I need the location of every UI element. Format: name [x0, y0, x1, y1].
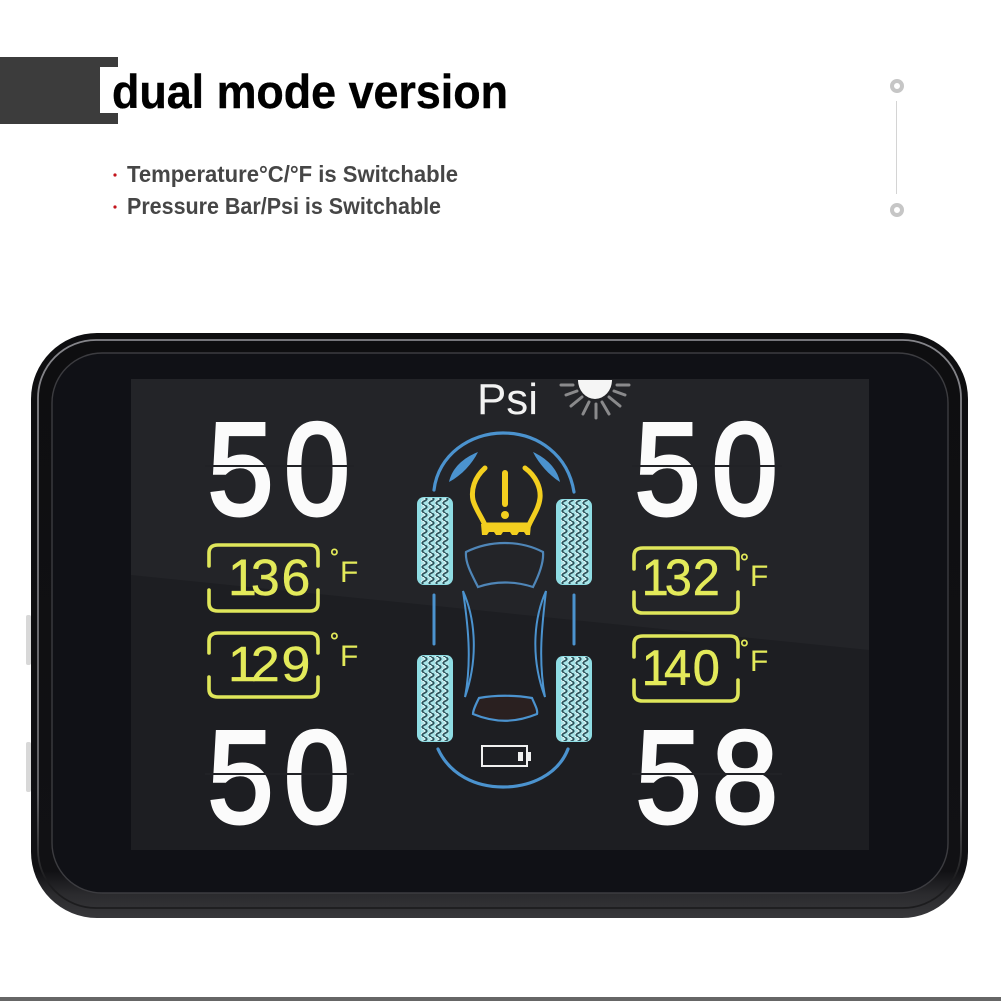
LCD screen [131, 379, 869, 850]
rear window [473, 696, 537, 721]
temperature front right [634, 548, 768, 613]
segment gaps on large digits [205, 466, 782, 774]
bullet 2 [113, 205, 117, 209]
unit: degrees F front right: ° [740, 549, 749, 574]
unit: degrees F front right [740, 549, 768, 593]
unit: degrees F rear right [740, 635, 768, 678]
temperature front left [209, 544, 358, 611]
car side lines [434, 591, 574, 697]
unit: degrees F rear right: F [750, 645, 768, 678]
unit: degrees F rear left: F [340, 640, 358, 673]
temperature front right: 132 [642, 549, 720, 606]
pressure rear right: 58 [636, 705, 778, 850]
temperature rear left: 129 [228, 636, 310, 692]
wheel rear left [417, 655, 453, 742]
pressure unit: Psi [477, 375, 538, 424]
icon: sun [561, 380, 629, 418]
device front glass [52, 353, 948, 893]
feature list [113, 161, 458, 219]
unit: degrees F rear right: ° [740, 635, 749, 660]
temperature front left: 136 [228, 550, 310, 606]
decorative connector with rings [892, 81, 902, 215]
windshield [466, 543, 543, 587]
wheel front left [417, 497, 453, 585]
device highlight line [38, 340, 961, 908]
unit: degrees F front left: F [340, 556, 358, 589]
unit: degrees F front left [330, 544, 358, 589]
bullet 1 [113, 173, 117, 177]
unit: degrees F front left: ° [330, 544, 339, 569]
temperature rear right [634, 635, 768, 701]
pressure front left: 50 [208, 397, 350, 542]
device body [31, 333, 968, 918]
temperature rear right: 140 [642, 640, 720, 696]
header tab [0, 57, 118, 124]
unit: degrees F rear left [330, 628, 358, 673]
device side buttons [26, 615, 31, 792]
wheels [417, 497, 592, 742]
feature: temperature: Temperature°C/°F is Switchable [127, 161, 458, 187]
wheel rear right [556, 656, 592, 742]
icon: battery [482, 746, 531, 766]
car rear arc [438, 749, 568, 787]
car diagram [417, 433, 592, 787]
pressure rear left: 50 [208, 705, 350, 850]
title: dual mode version [112, 65, 508, 118]
icon: tire pressure warning [472, 468, 540, 535]
feature: pressure: Pressure Bar/Psi is Switchable [127, 193, 441, 219]
front windshield streaks [449, 452, 560, 482]
unit: degrees F rear left: ° [330, 628, 339, 653]
wheel front right [556, 499, 592, 585]
pressure front right: 50 [635, 397, 777, 542]
footer rule [0, 997, 1001, 1001]
car front arc [434, 433, 574, 492]
monitor device [26, 333, 968, 918]
unit: degrees F front right: F [750, 560, 768, 593]
temperature rear left [209, 628, 358, 697]
